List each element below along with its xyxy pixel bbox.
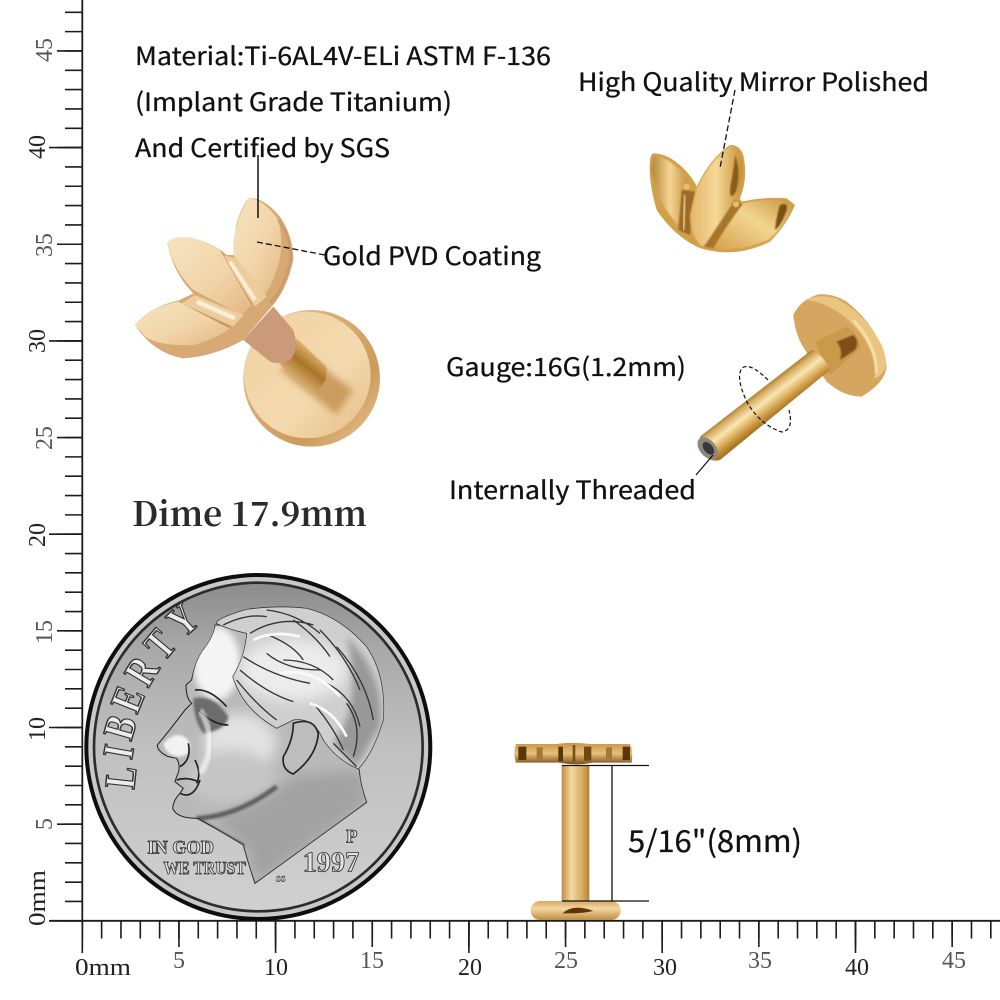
hair — [216, 607, 384, 769]
coin lettering: B — [94, 710, 147, 745]
title: material specification: And Certified by SGS — [135, 129, 390, 165]
dime coin — [84, 573, 432, 921]
dimension bracket — [562, 766, 649, 901]
ruler: horizontal scale: 35 — [748, 948, 772, 974]
ruler: vertical scale: 10 — [25, 717, 51, 741]
coin lettering: WE TRUST — [163, 858, 246, 878]
coin lettering: Y — [158, 594, 208, 646]
coin lettering: SS — [276, 874, 286, 884]
coin lettering: L — [96, 764, 146, 791]
coin lettering: IN GOD — [147, 837, 214, 858]
ruler: horizontal scale — [50, 921, 1000, 981]
product: side view with length dimension — [514, 743, 632, 920]
ruler: vertical scale: 45 — [32, 38, 58, 62]
ruler: horizontal scale: 20 — [458, 955, 482, 981]
portrait — [157, 607, 384, 883]
ruler: vertical scale: 35 — [32, 233, 58, 257]
comparison heading: Dime 17.9mm — [132, 487, 367, 536]
ruler: horizontal scale: 45 — [942, 948, 966, 974]
base — [531, 901, 621, 920]
back disc — [793, 294, 887, 397]
label: internal thread: Internally Threaded — [449, 471, 696, 507]
shaft — [562, 765, 589, 901]
title: material specification: (Implant Grade Titanium) — [135, 83, 452, 119]
ruler: horizontal scale: 0mm — [75, 955, 131, 981]
ruler: vertical scale: 30 — [25, 329, 51, 353]
coin lettering: 1997 — [303, 848, 359, 879]
ruler: vertical scale: 0mm — [25, 870, 51, 926]
ruler: horizontal scale: 40 — [845, 955, 869, 981]
coin rim — [84, 573, 432, 921]
product: flower top — [650, 145, 795, 252]
label: length: 5/16"(8mm) — [628, 817, 802, 861]
ruler: vertical scale: 40 — [25, 135, 51, 159]
ruler: horizontal scale: 10 — [264, 955, 288, 981]
label: gauge: Gauge:16G(1.2mm) — [446, 348, 686, 384]
leader line: mirror polish — [720, 90, 735, 168]
ruler: vertical scale: 5 — [32, 818, 58, 830]
coin lettering: P — [346, 827, 357, 848]
leader line: coating — [257, 242, 325, 255]
ruler: horizontal scale: 15 — [360, 948, 384, 974]
title: material specification: Material:Ti-6AL4V-ELi ASTM F-136 — [135, 37, 551, 73]
dashed gauge ring — [740, 366, 790, 432]
thread hole — [693, 433, 722, 463]
ruler: vertical scale: 25 — [32, 426, 58, 450]
ruler: vertical scale — [25, 0, 82, 926]
flower top and rose post — [135, 198, 296, 363]
ruler: horizontal scale: 25 — [554, 948, 578, 974]
ruler: horizontal scale: 30 — [653, 955, 677, 981]
ruler: horizontal scale: 5 — [173, 948, 185, 974]
product: threaded post — [693, 294, 887, 463]
leader line: certified — [257, 155, 259, 218]
ruler: vertical scale: 15 — [32, 620, 58, 644]
coin lettering: R — [115, 648, 169, 694]
title: material specification — [135, 37, 551, 165]
coin lettering — [94, 594, 359, 884]
ruler: vertical scale: 20 — [25, 523, 51, 547]
coin lettering: E — [102, 680, 155, 719]
back disc and sleeve — [243, 310, 380, 447]
flower edge — [514, 743, 632, 764]
label: coating: Gold PVD Coating — [323, 237, 541, 273]
label: mirror polished: High Quality Mirror Polished — [578, 63, 929, 99]
coin lettering: I — [94, 741, 144, 762]
product: assembled labret stud — [135, 198, 380, 447]
coin lettering: T — [135, 621, 186, 669]
face and neck — [157, 625, 367, 883]
leader line: internal thread — [696, 455, 713, 475]
ear — [283, 721, 318, 774]
shaft — [700, 350, 830, 461]
collar — [815, 327, 860, 375]
